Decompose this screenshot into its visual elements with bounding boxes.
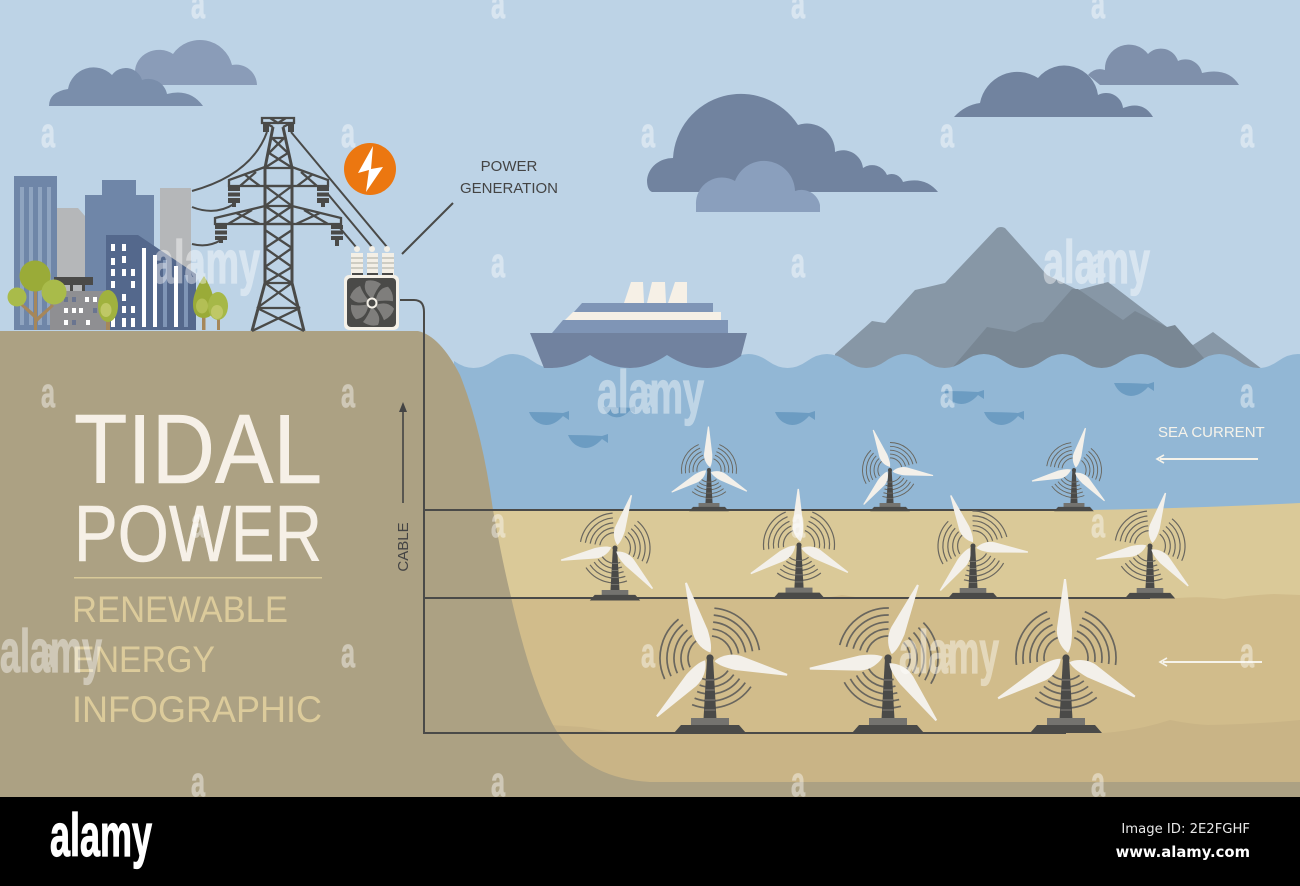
watermarks: a xyxy=(491,758,505,805)
turbines: middle row xyxy=(557,475,1215,607)
underwater cables xyxy=(400,300,1150,733)
watermarks: a xyxy=(341,109,355,156)
city skyline xyxy=(8,176,228,330)
fish group xyxy=(529,382,1154,448)
watermarks: a xyxy=(1091,499,1105,546)
watermarks: a xyxy=(1240,629,1254,676)
watermarks: a xyxy=(940,109,954,156)
grey tall building xyxy=(160,188,191,288)
pylon xyxy=(192,118,387,331)
watermarks: a xyxy=(491,499,505,546)
arrow: upper current xyxy=(1157,455,1258,463)
watermarks: a xyxy=(191,758,205,805)
mountains xyxy=(835,227,1262,375)
front mountain xyxy=(953,289,1210,375)
sea xyxy=(454,354,1300,530)
watermarks: a xyxy=(791,239,805,286)
back mountain xyxy=(835,227,1262,375)
watermarks: alamy xyxy=(153,229,260,296)
subtitle: RENEWABLE xyxy=(72,589,288,630)
cable label: CABLE xyxy=(395,522,412,572)
transformer xyxy=(344,246,399,330)
middle sand layer xyxy=(440,594,1300,782)
footer logo: alamy xyxy=(50,802,152,869)
arrow: cable direction xyxy=(399,402,407,503)
watermarks: a xyxy=(191,239,205,286)
blue stepped building xyxy=(85,180,154,330)
footer image id: Image ID: 2E2FGHF xyxy=(1121,822,1250,837)
watermarks: a xyxy=(641,109,655,156)
cloud: upper right back xyxy=(1088,45,1239,85)
lower sand layer xyxy=(510,720,1300,790)
ship xyxy=(530,282,747,368)
arrow: lower current xyxy=(1160,658,1262,666)
title: tidal: TIDAL xyxy=(74,394,322,504)
watermarks: a xyxy=(940,629,954,676)
title: power: POWER xyxy=(74,489,322,578)
cloud: upper right front xyxy=(954,66,1153,117)
subtitle: ENERGY xyxy=(72,639,215,680)
watermarks: alamy xyxy=(597,359,704,426)
power lines to transformer xyxy=(291,132,387,247)
upper sand layer xyxy=(440,503,1300,700)
cloud: upper left front xyxy=(49,67,203,106)
subtitle: INFOGRAPHIC xyxy=(72,689,322,730)
pylon insulators xyxy=(215,123,343,246)
transformer bushings xyxy=(351,246,394,275)
watermarks: a xyxy=(641,629,655,676)
grey building xyxy=(57,208,85,330)
ship top deck xyxy=(574,303,713,312)
callout: power generation: POWER xyxy=(481,158,537,175)
watermarks: a xyxy=(341,629,355,676)
tall striped tower xyxy=(14,176,57,330)
factory xyxy=(50,277,106,330)
footer bar xyxy=(0,797,1300,886)
ship funnels xyxy=(624,282,687,303)
ship white deck xyxy=(565,312,721,320)
cloud: large centre xyxy=(647,94,938,192)
callout leader line xyxy=(402,203,453,254)
watermarks: alamy xyxy=(899,619,999,686)
watermarks: a xyxy=(791,758,805,805)
turbines: top row xyxy=(670,415,1125,517)
cloud: small centre light xyxy=(696,161,820,212)
watermarks: a xyxy=(41,629,55,676)
watermarks: a xyxy=(41,109,55,156)
trees left xyxy=(8,260,118,330)
turbines: bottom row xyxy=(619,557,1139,741)
power lines to city xyxy=(192,132,267,245)
cloud: upper left back xyxy=(135,40,257,85)
watermarks: a xyxy=(1240,109,1254,156)
trees right xyxy=(193,276,228,330)
pylon lattice xyxy=(252,118,304,331)
lower cross arm xyxy=(215,206,341,224)
lightning icon xyxy=(344,143,396,195)
watermarks: a xyxy=(341,369,355,416)
title divider xyxy=(74,577,322,578)
watermarks: a xyxy=(641,369,655,416)
subtitle xyxy=(72,589,322,730)
callout: power generation: GENERATION xyxy=(460,180,558,197)
transformer box xyxy=(344,275,399,330)
sea current label: SEA CURRENT xyxy=(1158,424,1265,441)
ship hull xyxy=(530,333,747,368)
dark front building xyxy=(106,235,196,330)
cooling fan xyxy=(348,280,396,326)
footer url: www.alamy.com xyxy=(1116,844,1250,861)
ship lower deck xyxy=(552,320,728,333)
watermarks: a xyxy=(1240,369,1254,416)
land cross-section xyxy=(0,331,1300,800)
watermarks: a xyxy=(41,369,55,416)
watermarks: a xyxy=(1091,758,1105,805)
watermarks: a xyxy=(1091,239,1105,286)
watermarks: a xyxy=(191,499,205,546)
seabed sand layers xyxy=(440,503,1300,790)
watermarks: alamy xyxy=(1043,229,1150,296)
watermarks: a xyxy=(940,369,954,416)
watermarks: a xyxy=(791,499,805,546)
upper cross arm xyxy=(229,167,328,186)
watermarks: a xyxy=(491,239,505,286)
watermarks: alamy xyxy=(0,618,102,685)
